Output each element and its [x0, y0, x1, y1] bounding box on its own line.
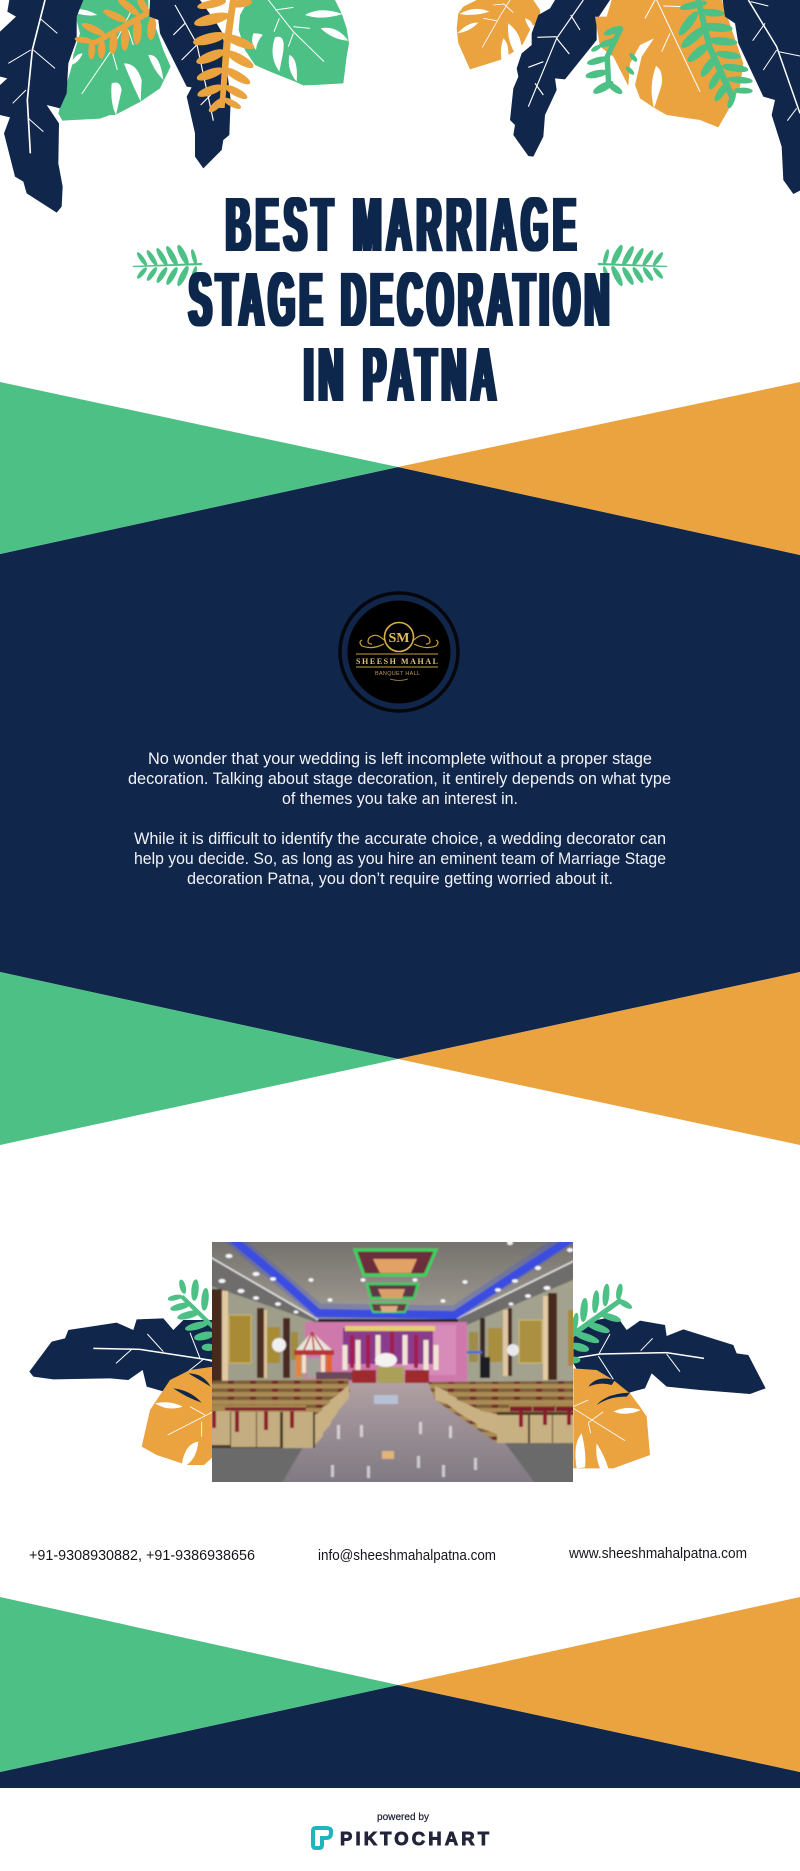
stage steps and plants [316, 1367, 429, 1383]
text block: introduction: No wonder that your wedding is left incomplete without a proper stage [148, 750, 652, 768]
green triangle, middle left [0, 972, 398, 1145]
title: IN PATNA [304, 331, 496, 418]
text block: advice: decoration Patna, you don’t require getting worried about it. [187, 870, 613, 888]
decoration: leaves left of photo [29, 1280, 214, 1465]
photo: banquet hall interior [205, 1235, 580, 1490]
navy leaf [0, 0, 83, 213]
right soffit and wall [456, 1260, 573, 1383]
sprig: left of title [133, 244, 202, 287]
text block: introduction [128, 750, 671, 808]
downlights [218, 1241, 573, 1314]
decoration: top-left leaves [0, 0, 349, 213]
green fern [168, 1280, 214, 1350]
orange fern, center [193, 0, 255, 113]
dark carpet areas [212, 1442, 573, 1482]
logo: Sheesh Mahal Banquet Hall: SHEESH MAHAL [356, 657, 438, 666]
contact: email: info@sheeshmahalpatna.com [318, 1548, 496, 1564]
decoration: leaves right of photo [570, 1284, 766, 1468]
contact: phone: +91-9308930882, +91-9386938656 [29, 1548, 255, 1564]
small green fern [586, 25, 638, 95]
green fern [570, 1284, 633, 1363]
left soffit and wall [212, 1256, 319, 1382]
chairs: left block [205, 1379, 350, 1448]
orange fern [75, 0, 156, 59]
navy leaf [510, 0, 610, 157]
dark ceiling edge [318, 1319, 458, 1322]
orange triangle, top right [398, 382, 800, 555]
text block: introduction: decoration. Talking about stage decoration, it entirely depends on what type [128, 770, 671, 788]
navy leaf [573, 1316, 766, 1394]
stage backdrop [305, 1322, 467, 1384]
orange monstera leaf [457, 0, 541, 69]
contact: website: www.sheeshmahalpatna.com [568, 1546, 747, 1562]
orange triangle, middle right [398, 972, 800, 1145]
orange monstera leaf, large [595, 0, 743, 127]
text block: advice [134, 830, 666, 888]
navy leaf [29, 1318, 213, 1393]
ceiling [212, 1242, 573, 1320]
decoration: top-right leaves [457, 0, 800, 194]
blue ceiling lights [228, 1235, 572, 1315]
navy bottom band [0, 1685, 800, 1788]
navy leaf, right edge [723, 0, 800, 194]
navy central band [0, 467, 800, 1059]
logo: Sheesh Mahal Banquet Hall: SM [388, 631, 410, 646]
logo: Sheesh Mahal Banquet Hall: BANQUET HALL [375, 671, 420, 677]
green triangle, top left [0, 382, 398, 554]
green triangle, bottom left [0, 1597, 398, 1772]
footer: Piktochart logo icon [313, 1828, 331, 1848]
sprig: right of title [598, 244, 667, 287]
green monstera leaf [58, 0, 171, 121]
orange monstera leaf [573, 1368, 650, 1468]
text block: advice: help you decide. So, as long as you hire an eminent team of Marriage Stage [134, 850, 666, 868]
footer: powered by: powered by [377, 1811, 430, 1823]
ceiling panels with green lights [355, 1250, 436, 1312]
text block: introduction: of themes you take an interest in. [282, 790, 518, 808]
canopy [294, 1332, 334, 1378]
title [189, 181, 609, 418]
title: STAGE DECORATION [189, 256, 609, 343]
right green monstera leaf [239, 0, 349, 85]
green fern [677, 0, 752, 108]
footer: Piktochart wordmark: PIKTOCHART [340, 1828, 490, 1849]
floor reflections [331, 1395, 477, 1478]
floor [282, 1382, 535, 1482]
second navy leaf [149, 0, 231, 168]
orange triangle, bottom right [398, 1597, 800, 1772]
chairs: right block [428, 1381, 580, 1443]
title: BEST MARRIAGE [226, 181, 576, 268]
logo: Sheesh Mahal Banquet Hall [340, 593, 458, 711]
orange monstera leaf [142, 1367, 213, 1465]
text block: advice: While it is difficult to identify the accurate choice, a wedding decorator can [134, 830, 666, 848]
